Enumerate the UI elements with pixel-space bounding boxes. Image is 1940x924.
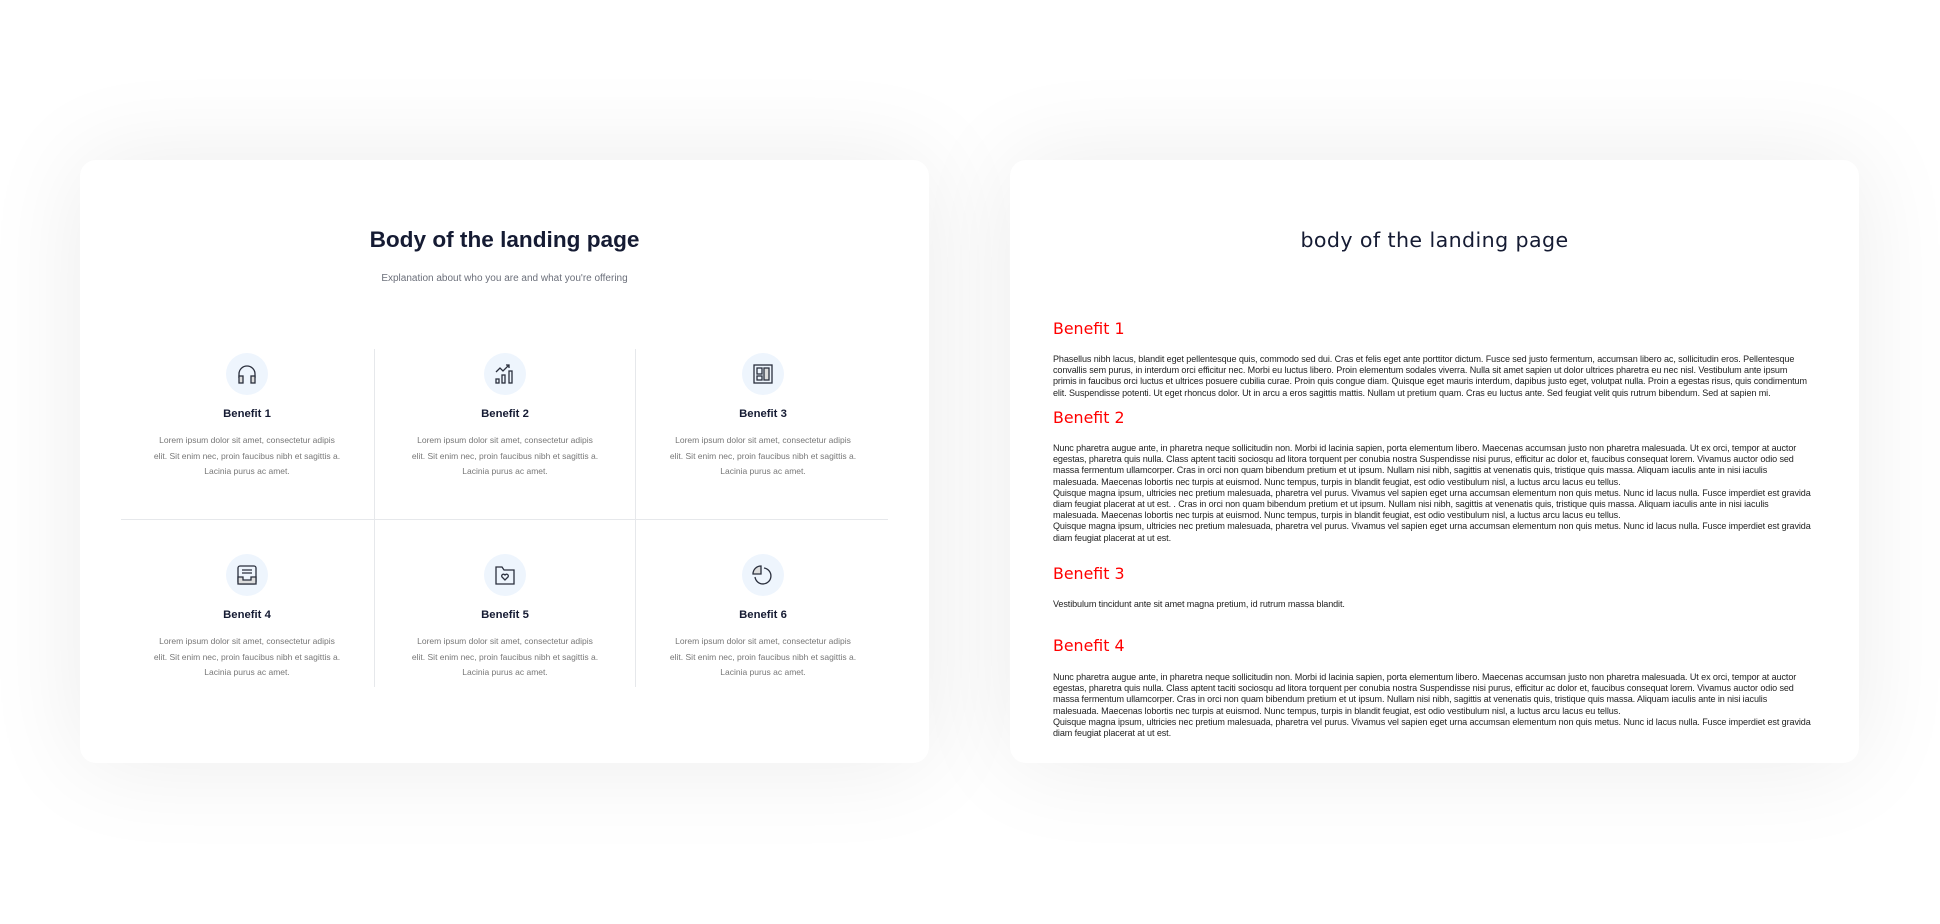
heading: benefit 1: Benefit 1 [1053, 319, 1125, 338]
benefit 1: elit. Sit enim nec, proin faucibus nibh et sagittis a. [154, 450, 340, 460]
paragraph: benefit 1: elit. Suspendisse potenti. Ut eget rhoncus dolor. Ut in arcu a eros sagittis mattis. Nullam ut pretium quam. Cras eu luctus ante. Sed feugiat velit quis rutrum bibendum. Sed at sapien mi. [1053, 388, 1770, 398]
icon: layout [742, 353, 784, 395]
benefit 6: Lorem ipsum dolor sit amet, consectetur adipis [675, 636, 851, 646]
paragraph: benefit 4: diam feugiat placerat at ut est. [1053, 728, 1171, 738]
benefit 6: Lacinia purus ac amet. [720, 667, 806, 677]
benefit 1: Lorem ipsum dolor sit amet, consectetur adipis [159, 435, 335, 445]
benefit 4: Lacinia purus ac amet. [204, 667, 290, 677]
paragraph: benefit 2: malesuada. Maecenas lobortis nec turpis at euismod. Nunc tempus, turpis in blandit feugiat, est odio vestibulum nisl, a luctus arcu lacus eu tellus. [1053, 477, 1621, 487]
paragraph: benefit 1 [1053, 354, 1807, 398]
benefit 2: Benefit 2 [481, 408, 529, 420]
paragraph: benefit 1: Phasellus nibh lacus, blandit eget pellentesque quis, commodo sed dui. Cras et felis eget ante porttitor dictum. Fusce sed justo fermentum, accumsan libero ac, sollicitudin eros. Pellentesque [1053, 354, 1794, 364]
icon: headphones [226, 353, 268, 395]
benefit 4 [154, 554, 340, 677]
paragraph: benefit 4: massa fermentum ullamcorper. Cras in orci non quam bibendum pretium et ut ipsum. Nullam nisi nibh, sagittis at venenatis quis, tristique quis massa. Aliquam iaculis ante in nisi iaculis [1053, 694, 1767, 704]
heading: benefit 3: Benefit 3 [1053, 564, 1125, 583]
paragraph: benefit 2: diam feugiat placerat at ut est. [1053, 533, 1171, 543]
subtitle: Explanation about who you are and what you're offering [381, 273, 628, 284]
benefit 1: Lacinia purus ac amet. [204, 466, 290, 476]
icon: inbox [226, 554, 268, 596]
paragraph: benefit 4: Nunc pharetra augue ante, in pharetra neque sollicitudin non. Morbi id lacinia sapien, porta elementum libero. Maecenas accumsan justo non pharetra malesuada. Ut ex orci, tempor at auctor [1053, 672, 1796, 682]
benefit 5: Lacinia purus ac amet. [462, 667, 548, 677]
paragraph: benefit 2: Nunc pharetra augue ante, in pharetra neque sollicitudin non. Morbi id lacinia sapien, porta elementum libero. Maecenas accumsan justo non pharetra malesuada. Ut ex orci, tempor at auctor [1053, 443, 1796, 453]
title: body of the landing page [1300, 228, 1569, 252]
benefit 6: elit. Sit enim nec, proin faucibus nibh et sagittis a. [670, 652, 856, 662]
icon: growth chart [484, 353, 526, 395]
panel: wireframe text version [1010, 160, 1859, 763]
benefit 4: Lorem ipsum dolor sit amet, consectetur adipis [159, 636, 335, 646]
panel: landing page design [80, 160, 929, 763]
benefit 3 [670, 353, 856, 476]
heading: benefit 4: Benefit 4 [1053, 636, 1125, 655]
benefit 6: Benefit 6 [739, 609, 787, 621]
benefit 1: Benefit 1 [223, 408, 271, 420]
paragraph: benefit 4: Quisque magna ipsum, ultricies nec pretium malesuada, pharetra vel purus. Vivamus vel sapien eget urna accumsan elementum non quis metus. Nunc id lacus nulla. Fusce imperdiet est gravida [1053, 717, 1811, 727]
paragraph: benefit 2: massa fermentum ullamcorper. Cras in orci non quam bibendum pretium et ut ipsum. Nullam nisi nibh, sagittis at venenatis quis, tristique quis massa. Aliquam iaculis ante in nisi iaculis [1053, 465, 1767, 475]
paragraph: benefit 4 [1053, 672, 1811, 738]
benefit 3: Lorem ipsum dolor sit amet, consectetur adipis [675, 435, 851, 445]
icon: pie chart [742, 554, 784, 596]
benefit 2: elit. Sit enim nec, proin faucibus nibh et sagittis a. [412, 450, 598, 460]
benefit 4: elit. Sit enim nec, proin faucibus nibh et sagittis a. [154, 652, 340, 662]
benefit 5: Lorem ipsum dolor sit amet, consectetur adipis [417, 636, 593, 646]
paragraph: benefit 4: malesuada. Maecenas lobortis nec turpis at euismod. Nunc tempus, turpis in blandit feugiat, est odio vestibulum nisl, a luctus arcu lacus eu tellus. [1053, 706, 1621, 716]
paragraph: benefit 3: Vestibulum tincidunt ante sit amet magna pretium, id rutrum massa blandit. [1053, 599, 1345, 609]
paragraph: benefit 2 [1053, 443, 1811, 543]
paragraph: benefit 2: Quisque magna ipsum, ultricies nec pretium malesuada, pharetra vel purus. Vivamus vel sapien eget urna accumsan elementum non quis metus. Nunc id lacus nulla. Fusce imperdiet est gravida [1053, 521, 1811, 531]
benefit 5 [412, 554, 598, 677]
paragraph: benefit 2: Quisque magna ipsum, ultricies nec pretium malesuada, pharetra vel purus. Vivamus vel sapien eget urna accumsan elementum non quis metus. Nunc id lacus nulla. Fusce imperdiet est gravida [1053, 488, 1811, 498]
benefit 2: Lorem ipsum dolor sit amet, consectetur adipis [417, 435, 593, 445]
heading: benefit 2: Benefit 2 [1053, 408, 1125, 427]
benefit 5: Benefit 5 [481, 609, 529, 621]
benefit 3: Benefit 3 [739, 408, 787, 420]
icon: folder heart [484, 554, 526, 596]
paragraph: benefit 4: egestas, pharetra quis nulla. Class aptent taciti sociosqu ad litora torquent per conubia nostra Suspendisse nisi purus, efficitur ac dolor et, faucibus consequat lorem. Vivamus auctor odio sed [1053, 683, 1794, 693]
benefit 2 [412, 353, 598, 476]
paragraph: benefit 2: egestas, pharetra quis nulla. Class aptent taciti sociosqu ad litora torquent per conubia nostra Suspendisse nisi purus, efficitur ac dolor et, faucibus consequat lorem. Vivamus auctor odio sed [1053, 454, 1794, 464]
title: Body of the landing page [370, 227, 639, 252]
benefit 5: elit. Sit enim nec, proin faucibus nibh et sagittis a. [412, 652, 598, 662]
paragraph: benefit 2: malesuada. Maecenas lobortis nec turpis at euismod. Nunc tempus, turpis in blandit feugiat, est odio vestibulum nisl, a luctus arcu lacus eu tellus. [1053, 510, 1621, 520]
benefit 4: Benefit 4 [223, 609, 271, 621]
benefit 2: Lacinia purus ac amet. [462, 466, 548, 476]
paragraph: benefit 1: convallis sem purus, in interdum orci efficitur nec. Morbi eu luctus libero. Proin elementum sodales viverra. Nulla sit amet sapien ut dolor ultrices pharetra eu nec nisl. Vestibulum ante ipsum [1053, 365, 1787, 375]
benefit 6 [670, 554, 856, 677]
benefit 3: Lacinia purus ac amet. [720, 466, 806, 476]
benefit 3: elit. Sit enim nec, proin faucibus nibh et sagittis a. [670, 450, 856, 460]
benefit 1 [154, 353, 340, 476]
paragraph: benefit 1: primis in faucibus orci luctus et ultrices posuere cubilia curae. Proin quis congue diam. Quisque eget mauris interdum, dapibus justo eget, volutpat nulla. Proin a egestas risus, quis condimentum [1053, 376, 1807, 386]
paragraph: benefit 2: diam feugiat placerat at ut est. . Cras in orci non quam bibendum pretium et ut ipsum. Nullam nisi nibh, sagittis at venenatis quis, tristique quis massa. Aliquam iaculis ante in nisi iaculis [1053, 499, 1769, 509]
